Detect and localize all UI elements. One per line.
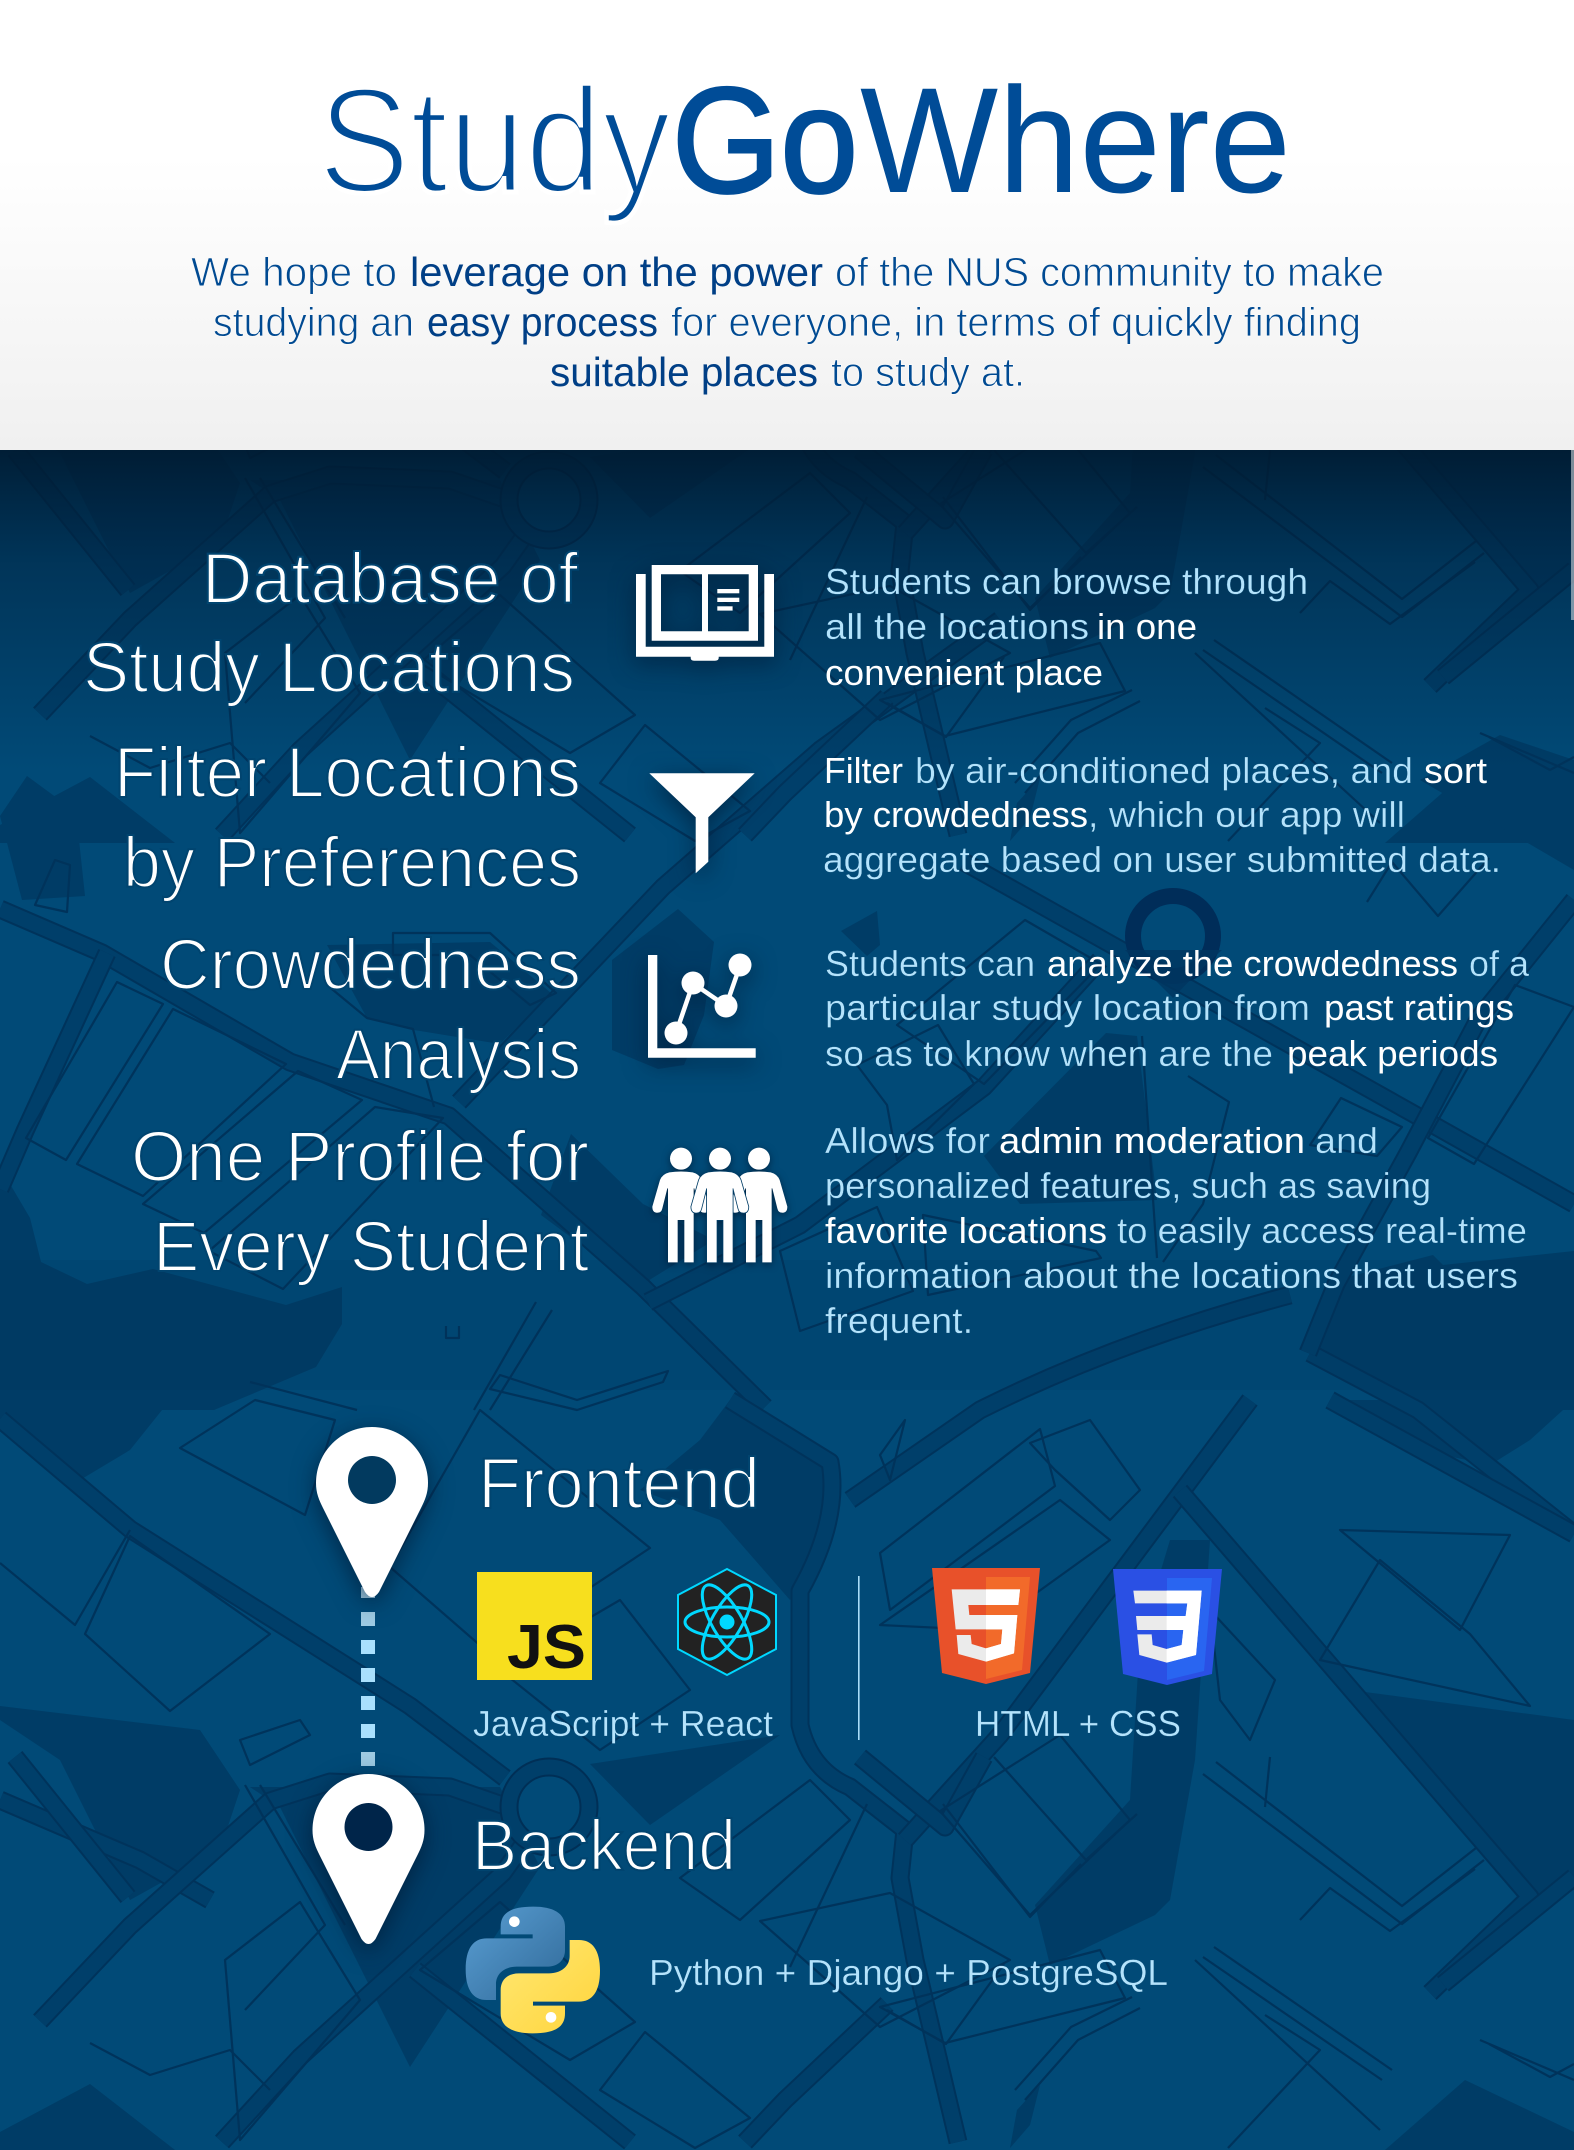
heading: database: Study Locations <box>83 629 575 708</box>
heading: frontend: Frontend <box>478 1445 760 1524</box>
divider line <box>858 1576 860 1740</box>
description: crowdedness: Students can <box>825 943 1035 984</box>
icon: JavaScript logo: JS <box>507 1613 586 1682</box>
heading: profile <box>131 1118 589 1287</box>
panel: database of study locations <box>83 540 1308 708</box>
panel: filter locations <box>114 734 1501 903</box>
icon: backend map pin <box>312 1774 424 1944</box>
description: crowdedness: so as to know when are the <box>825 1033 1273 1074</box>
heading: filter: Filter Locations <box>114 734 581 813</box>
description: profile: personalized features, such as saving <box>825 1165 1431 1206</box>
label: Python + Django + PostgreSQL: Python + Django + PostgreSQL <box>649 1952 1168 1993</box>
description: filter: , which our app will <box>1088 794 1405 835</box>
subtitle text: studying an <box>213 299 414 345</box>
panel: backend <box>312 1774 1168 2033</box>
description: database: in one <box>1097 606 1197 647</box>
heading: filter <box>114 734 581 903</box>
description: crowdedness <box>825 943 1530 1074</box>
subtitle text: suitable places <box>550 349 818 395</box>
icon: JavaScript logo <box>477 1572 592 1682</box>
subtitle text <box>191 249 1384 395</box>
subtitle text: easy process <box>427 299 658 345</box>
description: profile <box>825 1120 1527 1341</box>
description: crowdedness: particular study location from <box>825 987 1310 1028</box>
panel: one profile <box>131 1118 1527 1341</box>
subtitle text: We hope to <box>191 249 397 295</box>
icon: funnel <box>649 773 755 873</box>
icon: three people <box>652 1148 787 1262</box>
label: JavaScript + React: JavaScript + React <box>473 1703 773 1744</box>
heading: filter: by Preferences <box>123 824 581 903</box>
dashed connector <box>361 1587 375 1766</box>
heading: crowdedness <box>160 926 581 1095</box>
description: profile: information about the locations that users <box>825 1255 1518 1296</box>
description: database: convenient place <box>825 652 1103 693</box>
subtitle text: leverage on the power <box>410 249 823 295</box>
panel: header <box>0 0 1574 450</box>
heading: backend: Backend <box>472 1807 736 1886</box>
icon: frontend map pin <box>316 1427 428 1597</box>
description: database <box>825 561 1308 693</box>
icon: CSS3 logo <box>1113 1569 1222 1685</box>
description: filter: by air-conditioned places, and <box>915 750 1413 791</box>
subtitle text: of the NUS community to make <box>835 249 1384 295</box>
heading: crowdedness: Crowdedness <box>160 926 581 1005</box>
description: profile: Allows for <box>825 1120 990 1161</box>
description: database: Students can browse through <box>825 561 1308 602</box>
heading: profile: Every Student <box>153 1208 589 1287</box>
icon: Python logo <box>466 1907 600 2033</box>
subtitle text: for everyone, in terms of quickly finding <box>671 299 1361 345</box>
heading: profile: One Profile for <box>131 1118 589 1197</box>
icon: HTML5 logo <box>932 1568 1040 1684</box>
icon: line chart <box>648 954 756 1058</box>
heading: crowdedness: Analysis <box>336 1016 581 1095</box>
icon: React logo <box>678 1569 776 1675</box>
heading: database: Database of <box>202 540 578 619</box>
description: crowdedness: of a <box>1469 943 1530 984</box>
panel: frontend <box>316 1427 1222 1744</box>
panel: crowdedness analysis <box>160 926 1530 1095</box>
title: Go <box>672 56 858 224</box>
label: HTML + CSS: HTML + CSS <box>975 1703 1181 1744</box>
description: profile: admin moderation <box>999 1120 1305 1161</box>
description: crowdedness: analyze the crowdedness <box>1047 943 1458 984</box>
description: crowdedness: past ratings <box>1324 987 1514 1028</box>
description: profile: favorite locations <box>825 1210 1107 1251</box>
description: database: all the locations <box>825 606 1089 647</box>
description: filter: sort <box>1424 750 1487 791</box>
heading: database <box>83 540 578 708</box>
icon: open book <box>636 565 774 661</box>
description: filter: by crowdedness <box>824 794 1088 835</box>
description: crowdedness: peak periods <box>1287 1033 1498 1074</box>
subtitle text: to study at. <box>831 349 1025 395</box>
description: profile: frequent. <box>825 1300 973 1341</box>
description: filter: Filter <box>824 750 903 791</box>
description: filter: aggregate based on user submitted data. <box>823 839 1501 880</box>
description: filter <box>823 750 1501 880</box>
title: Where <box>860 56 1291 224</box>
description: profile: and <box>1315 1120 1378 1161</box>
title <box>318 56 1291 224</box>
description: profile: to easily access real-time <box>1117 1210 1527 1251</box>
title: Study <box>318 56 671 224</box>
